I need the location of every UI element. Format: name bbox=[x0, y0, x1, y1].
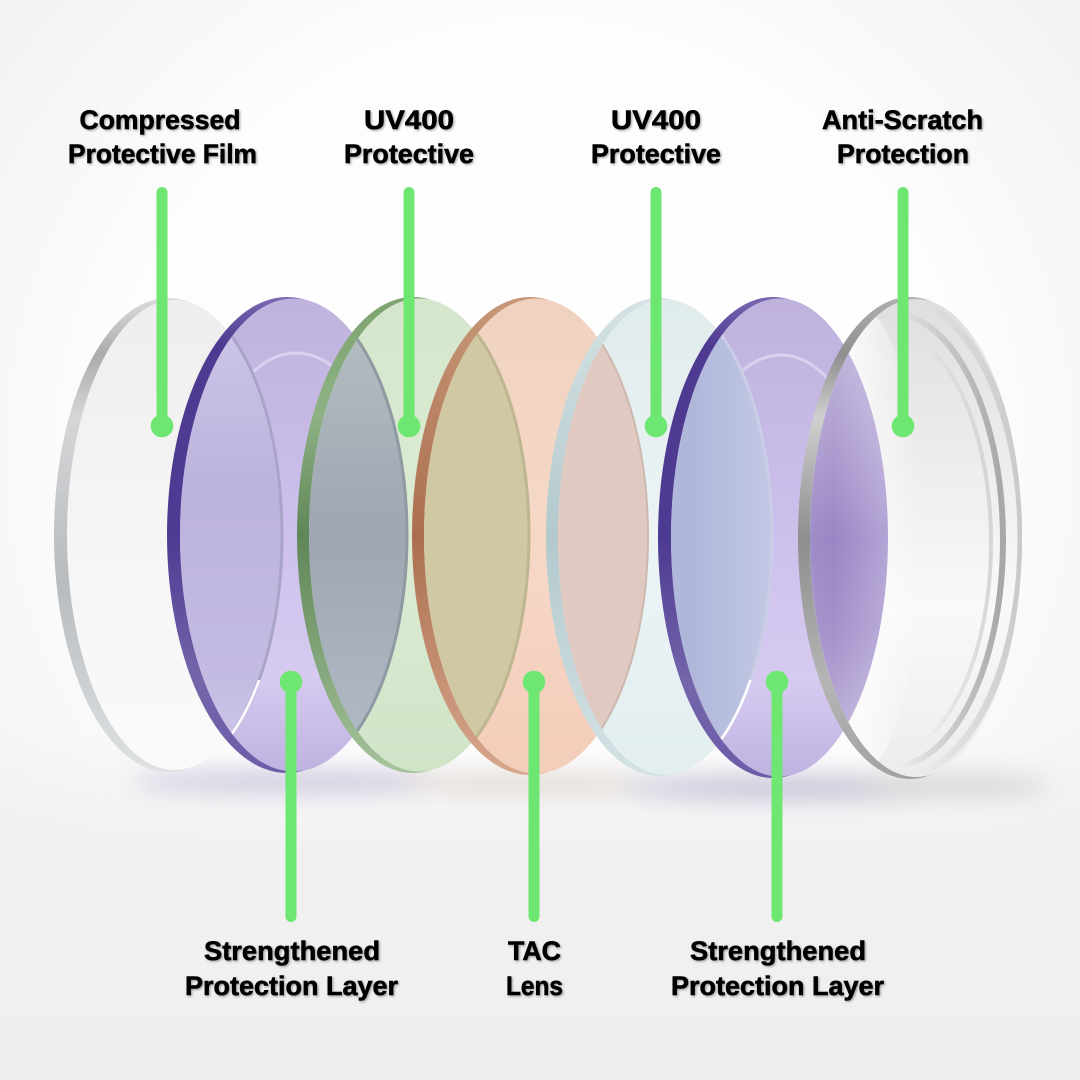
label: Compressed Protective Film bbox=[68, 105, 257, 169]
lens shadows on floor bbox=[130, 772, 1050, 800]
overlap: green over peach bbox=[424, 333, 530, 738]
leader: Anti-Scratch Protection bbox=[892, 187, 914, 437]
label: Strengthened Protection Layer right: Strengthened bbox=[690, 936, 866, 966]
lens 3: green UV400 bbox=[297, 297, 529, 773]
label: Compressed Protective Film: Protective Film bbox=[68, 139, 257, 169]
label: Strengthened Protection Layer left: Protection Layer bbox=[185, 971, 398, 1001]
lens 7: clear anti-scratch bbox=[779, 297, 1022, 779]
label: UV400 Protective left bbox=[344, 105, 474, 169]
label: TAC Lens: Lens bbox=[506, 971, 563, 1001]
lens 1: clear compressed film bbox=[54, 298, 282, 772]
overlap: peach over pale blue bbox=[558, 344, 649, 730]
leader: Strengthened Protection Layer left bbox=[280, 671, 302, 922]
lens stack bbox=[54, 297, 1022, 779]
stepped rings and highlight bbox=[810, 316, 1022, 766]
leader: Compressed Protective Film bbox=[151, 187, 173, 437]
overlap: film over purple bbox=[180, 335, 284, 735]
label: UV400 Protective right: Protective bbox=[591, 139, 721, 169]
label: Strengthened Protection Layer left bbox=[185, 936, 398, 1001]
label: UV400 Protective left: UV400 bbox=[364, 105, 454, 135]
label: Anti-Scratch Protection: Anti-Scratch bbox=[822, 105, 983, 135]
label: UV400 Protective right: UV400 bbox=[611, 105, 701, 135]
label: Strengthened Protection Layer right: Protection Layer bbox=[671, 971, 884, 1001]
label: UV400 Protective left: Protective bbox=[344, 139, 474, 169]
overlap: purple over green bbox=[309, 338, 408, 732]
label: TAC Lens: TAC bbox=[508, 936, 561, 966]
label: Anti-Scratch Protection bbox=[822, 105, 983, 169]
leader: Strengthened Protection Layer right bbox=[766, 671, 788, 922]
label: UV400 Protective right bbox=[591, 105, 721, 169]
label: Strengthened Protection Layer right bbox=[671, 936, 884, 1001]
label: Compressed Protective Film: Compressed bbox=[80, 105, 240, 135]
label: TAC Lens bbox=[506, 936, 563, 1001]
lens 6: purple layer bbox=[658, 297, 888, 778]
leader: UV400 Protective left bbox=[398, 187, 420, 437]
leader: UV400 Protective right bbox=[645, 187, 667, 437]
leader: TAC Lens bbox=[523, 671, 545, 922]
overlap: purple through clear bbox=[810, 354, 888, 722]
overlap: pale blue over purple bbox=[671, 334, 774, 740]
label: Anti-Scratch Protection: Protection bbox=[837, 139, 969, 169]
label: Strengthened Protection Layer left: Strengthened bbox=[204, 936, 380, 966]
lens 5: pale blue UV400 bbox=[546, 298, 772, 776]
lens 2: purple layer bbox=[167, 297, 407, 773]
lens 4: peach TAC bbox=[412, 297, 648, 775]
